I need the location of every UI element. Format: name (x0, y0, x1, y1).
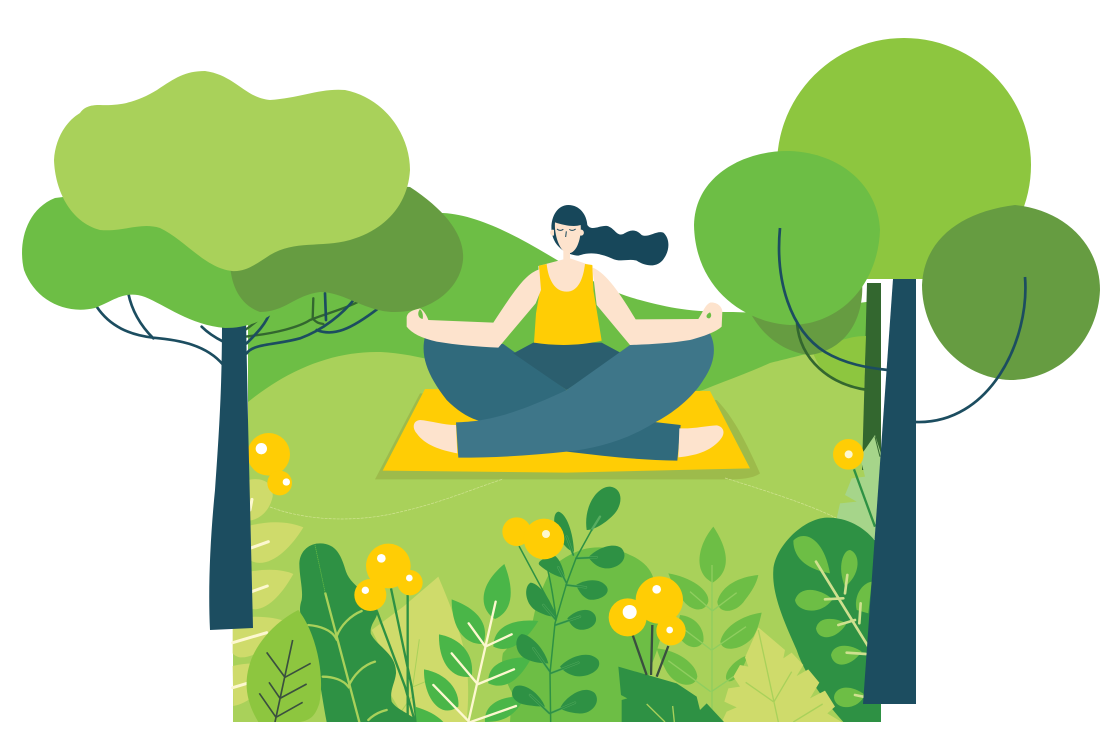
fern vein by trunk (875, 437, 880, 457)
right tree (694, 38, 1100, 704)
mat shadow (375, 393, 760, 479)
cluster flower stems (633, 625, 668, 677)
right crown (922, 205, 1100, 380)
crown shadow (745, 280, 862, 355)
serrated yellow leaf (722, 627, 842, 722)
light leaflets (793, 536, 872, 707)
bright green leaf cluster (415, 564, 538, 722)
yellow flowers with highlights (609, 439, 864, 645)
yoga mat (375, 389, 760, 479)
left foreground plants (233, 433, 538, 722)
right flower stem (854, 469, 875, 527)
trunk over near hill (862, 368, 865, 470)
right canopy (230, 180, 463, 312)
face (555, 222, 581, 253)
pale broad leaf veins (402, 639, 425, 711)
near hill (233, 338, 865, 722)
branches (779, 228, 1025, 422)
pale stems on leaflets (816, 562, 868, 697)
stalk leaves (512, 487, 624, 713)
right foot (678, 425, 724, 457)
trunk (209, 320, 253, 630)
corner leaf veins (259, 640, 311, 722)
large crown (777, 38, 1031, 279)
stalk stems (519, 530, 597, 722)
light green fern leaves (657, 527, 762, 685)
bright grass patch (813, 336, 866, 389)
pale fern behind trunk (837, 435, 881, 543)
mat surface (383, 389, 750, 473)
right arm (592, 267, 722, 345)
pale leaves along the edge (233, 479, 303, 706)
right foreground plants (609, 435, 881, 722)
serrated leaf veins (746, 630, 823, 722)
stalk leaf veins (530, 517, 600, 713)
trunk (863, 279, 916, 704)
stalk plant (502, 487, 624, 722)
grass paths (270, 478, 836, 519)
ears (550, 230, 584, 236)
midrib highlight (315, 545, 325, 593)
dark leaf at the bottom (618, 667, 724, 722)
dark leaf veins (647, 704, 674, 722)
left tree branches (97, 293, 378, 365)
cream leaf stems (433, 602, 516, 722)
left arm (407, 269, 541, 348)
left crown (694, 151, 880, 325)
finger gaps (418, 309, 711, 319)
woman meditating (407, 205, 724, 461)
dark wavy leaf (299, 543, 418, 722)
back leg (424, 337, 681, 461)
left foot (414, 420, 457, 453)
lap shadow (513, 343, 622, 390)
tall flower stems (377, 588, 417, 722)
background hills (233, 213, 881, 722)
hair (551, 205, 668, 265)
front leg (456, 333, 714, 458)
rounded green bush (502, 547, 663, 722)
fern stem (668, 565, 746, 722)
top canopy (54, 71, 410, 271)
far hill (248, 213, 866, 402)
dark wavy leaf veins (308, 593, 387, 722)
left tree (22, 71, 463, 630)
yellow flowers with highlights (247, 433, 423, 611)
pale broad leaf (372, 577, 468, 722)
closed eyes and nose (557, 229, 576, 237)
tank top (534, 264, 602, 345)
neck and chest (538, 243, 593, 300)
back tree trunk (865, 283, 881, 363)
pale leaf stems (233, 499, 268, 688)
stalk plant flowers (502, 517, 564, 559)
lower canopy (22, 180, 320, 328)
bright green corner leaf (247, 610, 321, 722)
big dark leaf with light leaflets (773, 518, 881, 722)
